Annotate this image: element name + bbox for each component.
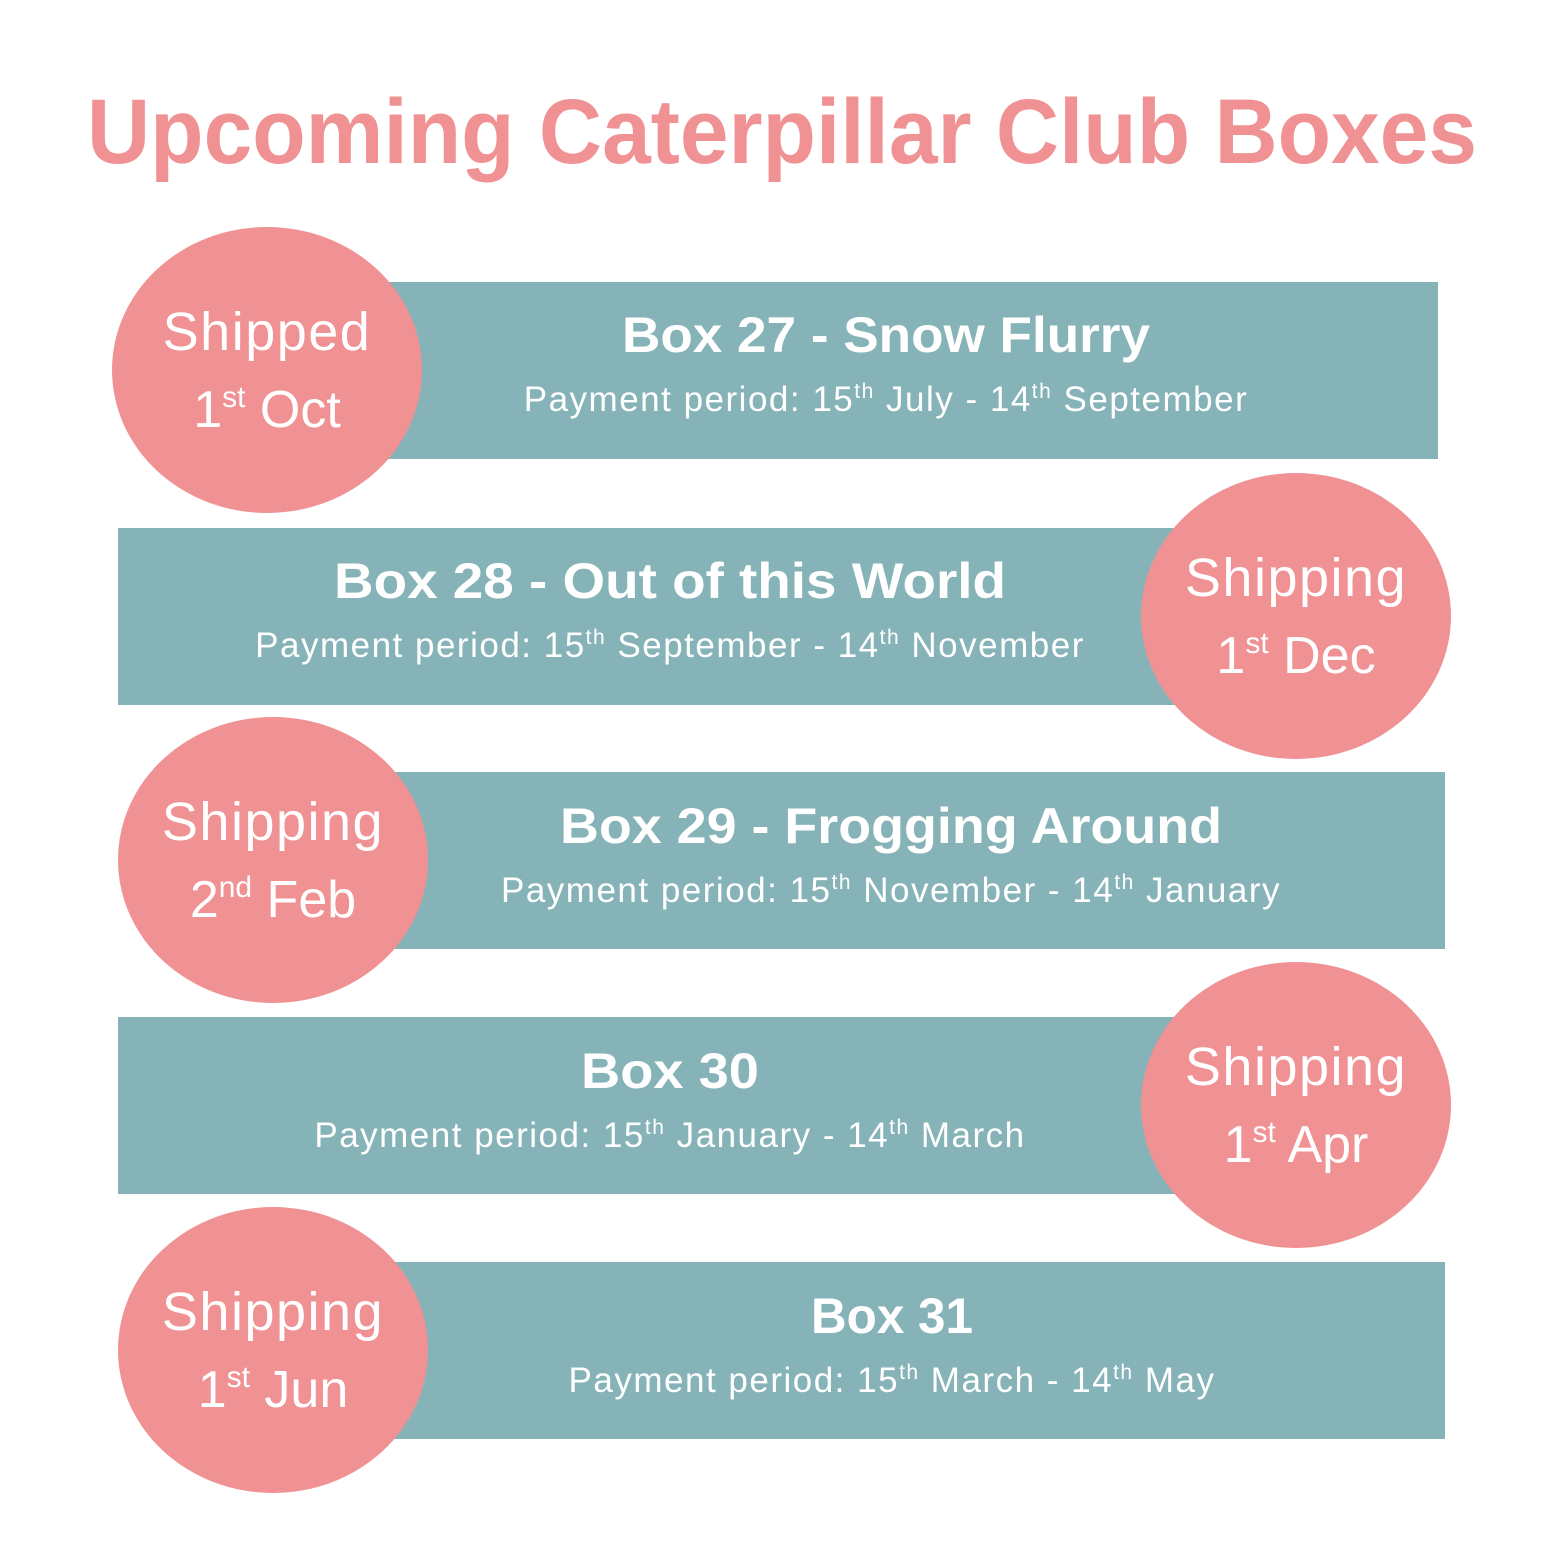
box 31 payment period: Payment period: 15: [569, 1361, 899, 1400]
box 30 payment period: March: [910, 1116, 1026, 1155]
circle: shipped 1st Oct: Shipped: [163, 302, 371, 362]
box 28 payment period: th: [880, 626, 900, 649]
title: Upcoming Caterpillar Club Boxes: [87, 81, 1477, 183]
circle: shipping 1st Jun: st: [227, 1361, 251, 1394]
box 28 payment period: Payment period: 15: [255, 626, 586, 665]
box 29 payment period: November - 14: [852, 871, 1114, 910]
circle: shipping 2nd Feb: [118, 717, 428, 1003]
circle: shipping 1st Jun: Shipping: [162, 1282, 384, 1342]
box 27 payment period: September: [1052, 380, 1248, 419]
box 29 title: Box 29 - Frogging Around: [560, 798, 1222, 854]
box 31 payment period: th: [899, 1361, 920, 1384]
box 28 title: Box 28 - Out of this World: [334, 553, 1006, 609]
circle: shipped 1st Oct: [112, 227, 422, 513]
row: box 27: [112, 227, 1438, 513]
box 30 title: Box 30: [581, 1043, 759, 1099]
box 29 payment period: th: [832, 871, 852, 894]
row: box 29: [118, 717, 1445, 1003]
box 31 payment period: th: [1113, 1361, 1134, 1384]
box 28 payment period: September - 14: [606, 626, 880, 665]
box 31 payment period: March - 14: [920, 1361, 1113, 1400]
circle: shipping 1st Jun: [118, 1207, 428, 1493]
box 30 payment period: th: [889, 1116, 910, 1139]
circle: shipping 1st Apr: Apr: [1276, 1116, 1368, 1174]
circle: shipping 2nd Feb: 2: [190, 871, 219, 929]
box 30 payment period: th: [645, 1116, 665, 1139]
circle: shipping 2nd Feb: Feb: [252, 871, 356, 929]
bar: box 28: [118, 528, 1198, 705]
box 31 title: Box 31: [811, 1288, 973, 1344]
circle: shipped 1st Oct: st: [222, 381, 246, 414]
circle: shipping 1st Dec: 1: [1216, 627, 1245, 685]
circle: shipping 2nd Feb: Shipping: [162, 792, 384, 852]
circle: shipping 1st Dec: Dec: [1269, 627, 1376, 685]
circle: shipped 1st Oct: Oct: [245, 381, 341, 439]
box 30 payment period: Payment period: 15: [314, 1116, 645, 1155]
box 29 payment period: January: [1135, 871, 1281, 910]
circle: shipping 1st Jun: 1: [198, 1361, 227, 1419]
circle: shipping 1st Jun: Jun: [250, 1361, 348, 1419]
circle: shipping 1st Apr: [1141, 962, 1451, 1248]
circle: shipped 1st Oct: 1: [193, 381, 222, 439]
bar: box 31: [380, 1262, 1445, 1439]
box 27 payment period: July - 14: [875, 380, 1032, 419]
circle: shipping 1st Apr: 1: [1224, 1116, 1253, 1174]
box 27 payment period: Payment period: 15: [524, 380, 854, 419]
box 29 payment period: th: [1114, 871, 1135, 894]
box 29 payment period: Payment period: 15: [501, 871, 832, 910]
row: box 30: [118, 962, 1451, 1248]
box 27 title: Box 27 - Snow Flurry: [622, 307, 1150, 363]
circle: shipping 1st Apr: Shipping: [1185, 1037, 1407, 1097]
bar: box 30: [118, 1017, 1198, 1194]
box 31 payment period: May: [1134, 1361, 1215, 1400]
box 30 payment period: January - 14: [665, 1116, 889, 1155]
box 28 payment period: November: [900, 626, 1085, 665]
circle: shipping 1st Dec: st: [1245, 627, 1269, 660]
row: box 28: [118, 473, 1451, 759]
box 27 payment period: th: [854, 380, 875, 403]
box 28 payment period: th: [586, 626, 606, 649]
circle: shipping 1st Apr: st: [1253, 1116, 1277, 1149]
circle: shipping 1st Dec: Shipping: [1185, 548, 1407, 608]
circle: shipping 2nd Feb: nd: [219, 871, 252, 904]
circle: shipping 1st Dec: [1141, 473, 1451, 759]
box 27 payment period: th: [1032, 380, 1052, 403]
bar: box 27: [370, 282, 1438, 459]
row: box 31: [118, 1207, 1445, 1493]
bar: box 29: [380, 772, 1445, 949]
